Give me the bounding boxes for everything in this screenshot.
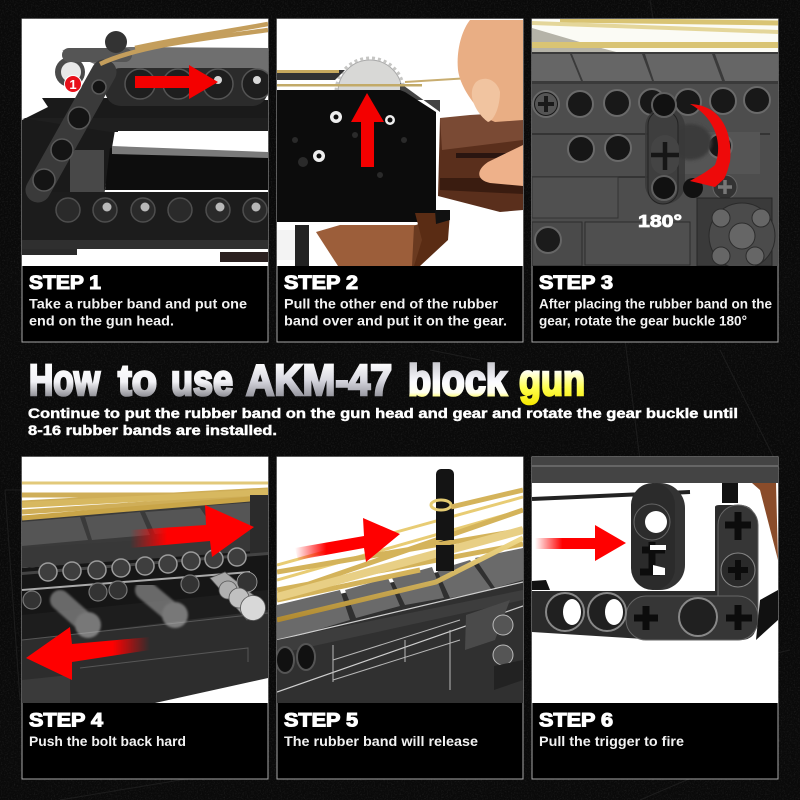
step 3 description: gear, rotate the gear buckle 180° <box>539 312 747 328</box>
panel: step 1 <box>22 19 272 342</box>
black pin <box>436 469 454 545</box>
step 6 description: Pull the trigger to fire <box>539 733 684 749</box>
red arrow <box>351 93 384 167</box>
step 4 heading: STEP 4 <box>29 710 103 732</box>
panel: step 4 <box>22 457 268 779</box>
panel: step 6 <box>532 457 778 779</box>
blurred bolt positions <box>60 590 188 638</box>
step 2 heading: STEP 2 <box>284 273 358 294</box>
panel: step 5 <box>276 457 523 779</box>
title: to <box>118 356 157 405</box>
number marker 1 <box>64 76 82 92</box>
photo: gun head with rubber band <box>22 19 272 266</box>
step 6 heading: STEP 6 <box>539 710 613 732</box>
step 5 description: The rubber band will release <box>284 733 478 749</box>
photo: gear buckle close-up <box>532 19 778 269</box>
photo: gear and hand <box>277 19 523 266</box>
photo: rubber bands releasing <box>276 457 523 703</box>
number marker 1: 1 <box>69 77 77 92</box>
red arrow <box>535 525 626 561</box>
step 3 description: After placing the rubber band on the <box>539 296 772 312</box>
title: How <box>29 356 101 405</box>
180 degree label: 180° <box>638 211 682 231</box>
step 2 description: Pull the other end of the rubber <box>284 296 499 312</box>
curved red arrow <box>690 104 730 187</box>
title: use <box>171 356 233 405</box>
subtitle: 8-16 rubber bands are installed. <box>28 422 277 438</box>
title: AKM-47 <box>246 356 392 405</box>
step 1 description: Take a rubber band and put one <box>29 296 247 312</box>
subtitle: Continue to put the rubber band on the gun head and gear and rotate the gear buckle until <box>28 405 738 421</box>
photo: bolt pushed back <box>22 457 268 703</box>
red arrow <box>295 518 400 562</box>
red arrow left <box>26 627 150 680</box>
panel: step 3 <box>532 19 778 342</box>
title <box>29 356 585 405</box>
step 5 heading: STEP 5 <box>284 710 358 732</box>
trigger link <box>631 483 685 590</box>
step 4 description: Push the bolt back hard <box>29 733 186 749</box>
step 1 heading: STEP 1 <box>29 273 101 294</box>
step 1 description: end on the gun head. <box>29 312 174 328</box>
red arrow right <box>130 505 254 557</box>
step 3 heading: STEP 3 <box>539 273 613 294</box>
step 2 description: band over and put it on the gear. <box>284 312 507 328</box>
photo: trigger mechanism <box>532 457 778 703</box>
bolt <box>210 572 266 620</box>
panel: step 2 <box>277 19 523 342</box>
red arrow <box>135 65 218 99</box>
title: block <box>408 356 507 405</box>
title: gun <box>519 356 585 405</box>
L-shaped beam <box>532 505 756 640</box>
